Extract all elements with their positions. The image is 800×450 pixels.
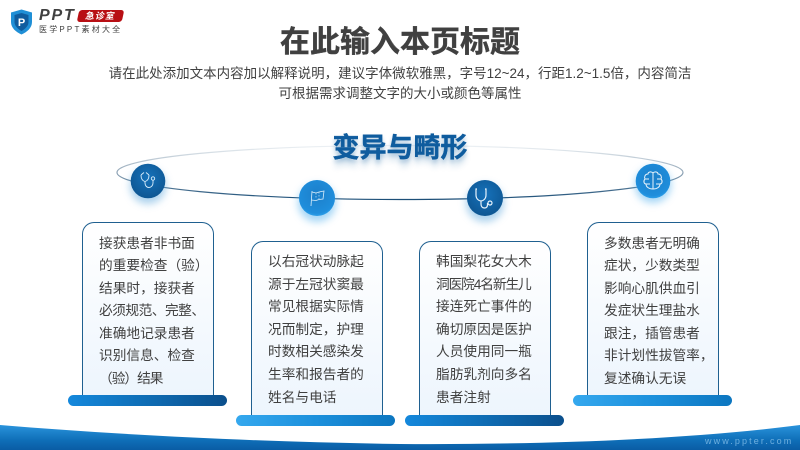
card 3 text: 接连死亡事件的 [436, 299, 532, 314]
card 2 text: 源于左冠状窦最 [268, 277, 364, 292]
subtitle text: 请在此处添加文本内容加以解释说明，建议字体微软雅黑，字号12~24，行距1.2~1.5倍，内容简洁 [109, 66, 691, 80]
panel: card 1 [68, 222, 227, 406]
card 1 text: 结果时，接获者 [99, 281, 195, 296]
card 3 text: 患者注射 [436, 390, 491, 405]
card 1 text: 的重要检查（验） [99, 258, 209, 273]
node 1: stethoscope icon [126, 164, 170, 208]
icon: shield [11, 10, 32, 34]
logo red tag [77, 10, 124, 22]
bottom wave band [0, 425, 800, 450]
card 2 text: 常见根据实际情 [268, 299, 364, 314]
card 4 text: 发症状生理盐水 [604, 303, 700, 318]
logo red tag: 急诊室 [84, 11, 117, 21]
card 2 body [250, 241, 382, 416]
card 3 text [436, 254, 532, 405]
card 4 text: 症状，少数类型 [604, 258, 700, 273]
card 3 text: 韩国梨花女大木 [436, 254, 532, 269]
card 4 base bar [573, 395, 732, 406]
card 4 body [587, 222, 719, 396]
card 4 text: 跟注，插管患者 [604, 326, 700, 341]
node 3: stethoscope icon [462, 180, 508, 226]
card 4 text: 多数患者无明确 [604, 236, 700, 250]
card 2 text: 时数相关感染发 [268, 344, 364, 359]
card 4 text [604, 236, 714, 386]
logo [11, 7, 124, 34]
card 4 text: 非计划性拔管率， [604, 348, 714, 363]
icon: shield: P [18, 17, 25, 29]
card 2 text: 以右冠状动脉起 [268, 254, 364, 269]
card 4 text: 复述确认无误 [604, 371, 686, 386]
subtitle text [109, 66, 691, 100]
node 2: flag icon [293, 179, 341, 227]
card 3 base bar [405, 415, 564, 426]
section heading: 变异与畸形 [332, 133, 468, 163]
logo wordmark: PPT [39, 7, 76, 24]
card 1 text: 接获患者非书面 [99, 236, 195, 250]
orbit ellipse [116, 145, 684, 200]
card 3 text: 人员使用同一瓶 [436, 344, 532, 359]
card 2 base bar [236, 415, 395, 426]
card 3 text: 洞医院4名新生儿 [436, 277, 531, 292]
card 3 text: 确切原因是医护 [436, 322, 532, 337]
card 2 text: 况而制定，护理 [268, 322, 364, 337]
card 1 base bar [68, 395, 227, 406]
card 3 body [419, 241, 551, 416]
card 1 text: （验）结果 [99, 371, 162, 386]
title: 在此输入本页标题 [280, 26, 520, 59]
panel: card 4 [573, 222, 732, 406]
panel: card 2 [236, 241, 395, 426]
subtitle text: 可根据需求调整文字的大小或颜色等属性 [278, 86, 522, 100]
card 2 text [268, 254, 364, 405]
card 1 body [82, 222, 214, 396]
logo subtitle: 医学PPT素材大全 [39, 25, 122, 34]
card 2 text: 生率和报告者的 [268, 367, 364, 382]
card 1 text: 准确地记录患者 [99, 326, 195, 341]
card 3 text: 脂肪乳剂向多名 [436, 367, 532, 382]
card 1 text [99, 236, 209, 386]
card 2 text: 姓名与电话 [268, 390, 336, 405]
panel: card 3 [405, 241, 564, 426]
card 4 text: 影响心肌供血引 [604, 281, 700, 296]
card 1 text: 必须规范、完整、 [99, 303, 205, 318]
website watermark: www.ppter.com [705, 436, 793, 446]
node 4: brain icon [630, 162, 676, 208]
card 1 text: 识别信息、检查 [99, 348, 195, 363]
